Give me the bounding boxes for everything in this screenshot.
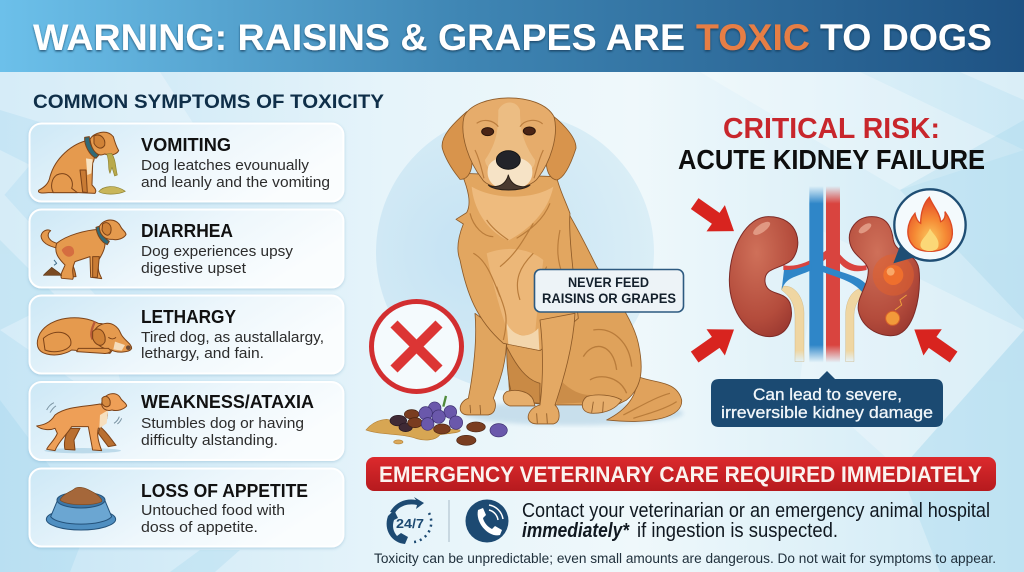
inflammation	[873, 254, 914, 296]
far paw	[503, 390, 535, 406]
text: diarrhea: digestive upset	[141, 261, 246, 277]
illustration: kidneys	[685, 186, 966, 370]
torso	[500, 193, 641, 405]
illustration: golden retriever	[442, 98, 683, 425]
callout: kidney damage: Can lead to severe,	[753, 385, 902, 404]
card: diarrhea	[30, 210, 344, 288]
speech bubble with flame	[893, 189, 966, 263]
text: loss of appetite	[141, 481, 308, 536]
title	[33, 17, 992, 58]
text: lethargy: lethargy, and fain.	[141, 346, 264, 362]
hind paw	[582, 395, 622, 413]
artery	[826, 186, 840, 363]
callout: never feed: NEVER FEED	[568, 275, 649, 290]
callout: never feed	[534, 270, 684, 312]
ears	[442, 112, 475, 179]
text: loss of appetite: Untouched food with	[141, 503, 285, 519]
text: lethargy: Tired dog, as austallalargy,	[141, 330, 324, 346]
card: vomiting	[30, 124, 344, 202]
text: loss of appetite: doss of appetite.	[141, 520, 258, 536]
haunch fur	[583, 330, 632, 393]
text: diarrhea: DIARRHEA	[141, 221, 233, 241]
panel: symptoms list	[30, 124, 344, 546]
card: lethargy	[30, 296, 344, 374]
eyes	[482, 128, 494, 136]
icon: 24/7 phone: 24/7	[396, 517, 424, 531]
text: vomiting: VOMITING	[141, 135, 231, 155]
footer note: Toxicity can be unpredictable; even small amounts are dangerous. Do not wait for symptoms to appear.	[374, 551, 996, 566]
icon: prohibition X	[372, 302, 462, 392]
text: contact instructions: if ingestion is suspected.	[637, 520, 838, 542]
heading: critical risk	[678, 113, 985, 175]
text: lethargy	[141, 307, 324, 362]
nose and mouth	[496, 151, 520, 169]
text: contact instructions	[522, 500, 990, 542]
title: WARNING: RAISINS & GRAPES ARE	[33, 17, 685, 58]
card: loss of appetite	[30, 468, 344, 546]
icon: stumbling dog	[37, 394, 127, 453]
text: vomiting: Dog leatches evounually	[141, 158, 310, 174]
ureters	[782, 286, 870, 362]
red vessels	[783, 250, 867, 271]
text: diarrhea: Dog experiences upsy	[141, 244, 294, 260]
text: weakness: Stumbles dog or having	[141, 416, 304, 432]
head	[463, 98, 555, 188]
right front leg	[528, 313, 575, 424]
title: TO DOGS	[820, 17, 992, 58]
illustration: spilled raisins and grapes	[366, 396, 507, 445]
right kidney	[849, 217, 919, 336]
heading: common symptoms: COMMON SYMPTOMS OF TOXICITY	[33, 92, 384, 113]
text: vomiting	[141, 135, 330, 191]
icon: lethargic dog	[37, 318, 132, 355]
text: contact instructions: immediately*	[522, 520, 630, 542]
divider	[448, 500, 450, 542]
muzzle	[488, 157, 532, 190]
heading: critical risk: ACUTE KIDNEY FAILURE	[678, 144, 985, 175]
emergency banner: EMERGENCY VETERINARY CARE REQUIRED IMMEDIATELY	[379, 462, 982, 487]
text: weakness: difficulty alstanding.	[141, 433, 278, 449]
tail	[607, 377, 682, 421]
icon: 24/7 phone	[387, 497, 431, 544]
vena	[809, 186, 823, 363]
callout: kidney damage	[711, 371, 943, 427]
text: lethargy: LETHARGY	[141, 307, 236, 327]
blue branches	[782, 263, 870, 292]
icon: vomiting dog	[38, 132, 125, 194]
belly shadow	[507, 347, 540, 403]
title: TOXIC	[696, 17, 810, 58]
text: weakness	[141, 392, 314, 449]
ruff and chest fur	[456, 173, 578, 351]
left kidney	[729, 217, 798, 337]
icon: food bowl	[46, 487, 116, 530]
callout: kidney damage: irreversible kidney damage	[721, 403, 933, 422]
text: weakness: WEAKNESS/ATAXIA	[141, 392, 314, 412]
left front leg	[460, 313, 507, 415]
text: diarrhea	[141, 221, 294, 277]
backdrop circle behind dog	[376, 113, 654, 391]
text: loss of appetite: LOSS OF APPETITE	[141, 481, 308, 501]
header banner	[0, 0, 1024, 72]
heading: critical risk: CRITICAL RISK:	[723, 113, 940, 145]
text: vomiting: and leanly and the vomiting	[141, 175, 330, 191]
icon: phone	[466, 500, 508, 542]
icon: diarrhea dog	[41, 220, 126, 279]
card: weakness	[30, 382, 344, 460]
callout: never feed: RAISINS OR GRAPES	[542, 291, 676, 306]
arrows	[685, 190, 963, 370]
